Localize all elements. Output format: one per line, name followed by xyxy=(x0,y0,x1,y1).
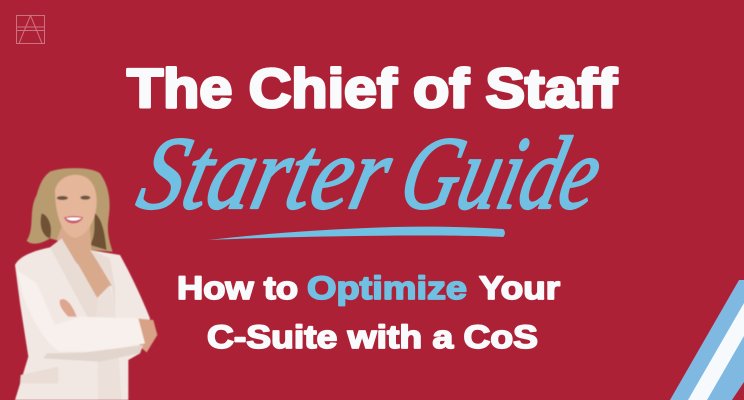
script heading xyxy=(128,115,613,231)
subtitle: Your xyxy=(479,270,560,306)
hair xyxy=(27,168,113,252)
subtitle: How to xyxy=(177,270,298,306)
forearm xyxy=(17,270,145,352)
title: The Chief of Staff xyxy=(127,57,618,119)
script heading: Guide xyxy=(390,115,613,231)
corner stripes xyxy=(670,280,744,400)
eyes and smile xyxy=(57,196,90,223)
face xyxy=(55,175,97,238)
neck and chest xyxy=(57,227,112,300)
blazer base xyxy=(15,238,150,400)
hand xyxy=(60,299,77,317)
subtitle: C-Suite with a CoS xyxy=(207,319,538,355)
subtitle xyxy=(177,270,560,355)
portrait: woman in white blazer xyxy=(15,168,157,400)
subtitle: Optimize xyxy=(307,270,467,306)
camisole xyxy=(97,285,122,400)
lapels xyxy=(50,238,115,318)
script heading: Starter xyxy=(128,115,404,231)
icon: logo xyxy=(16,16,44,44)
underline brush stroke xyxy=(208,227,505,240)
